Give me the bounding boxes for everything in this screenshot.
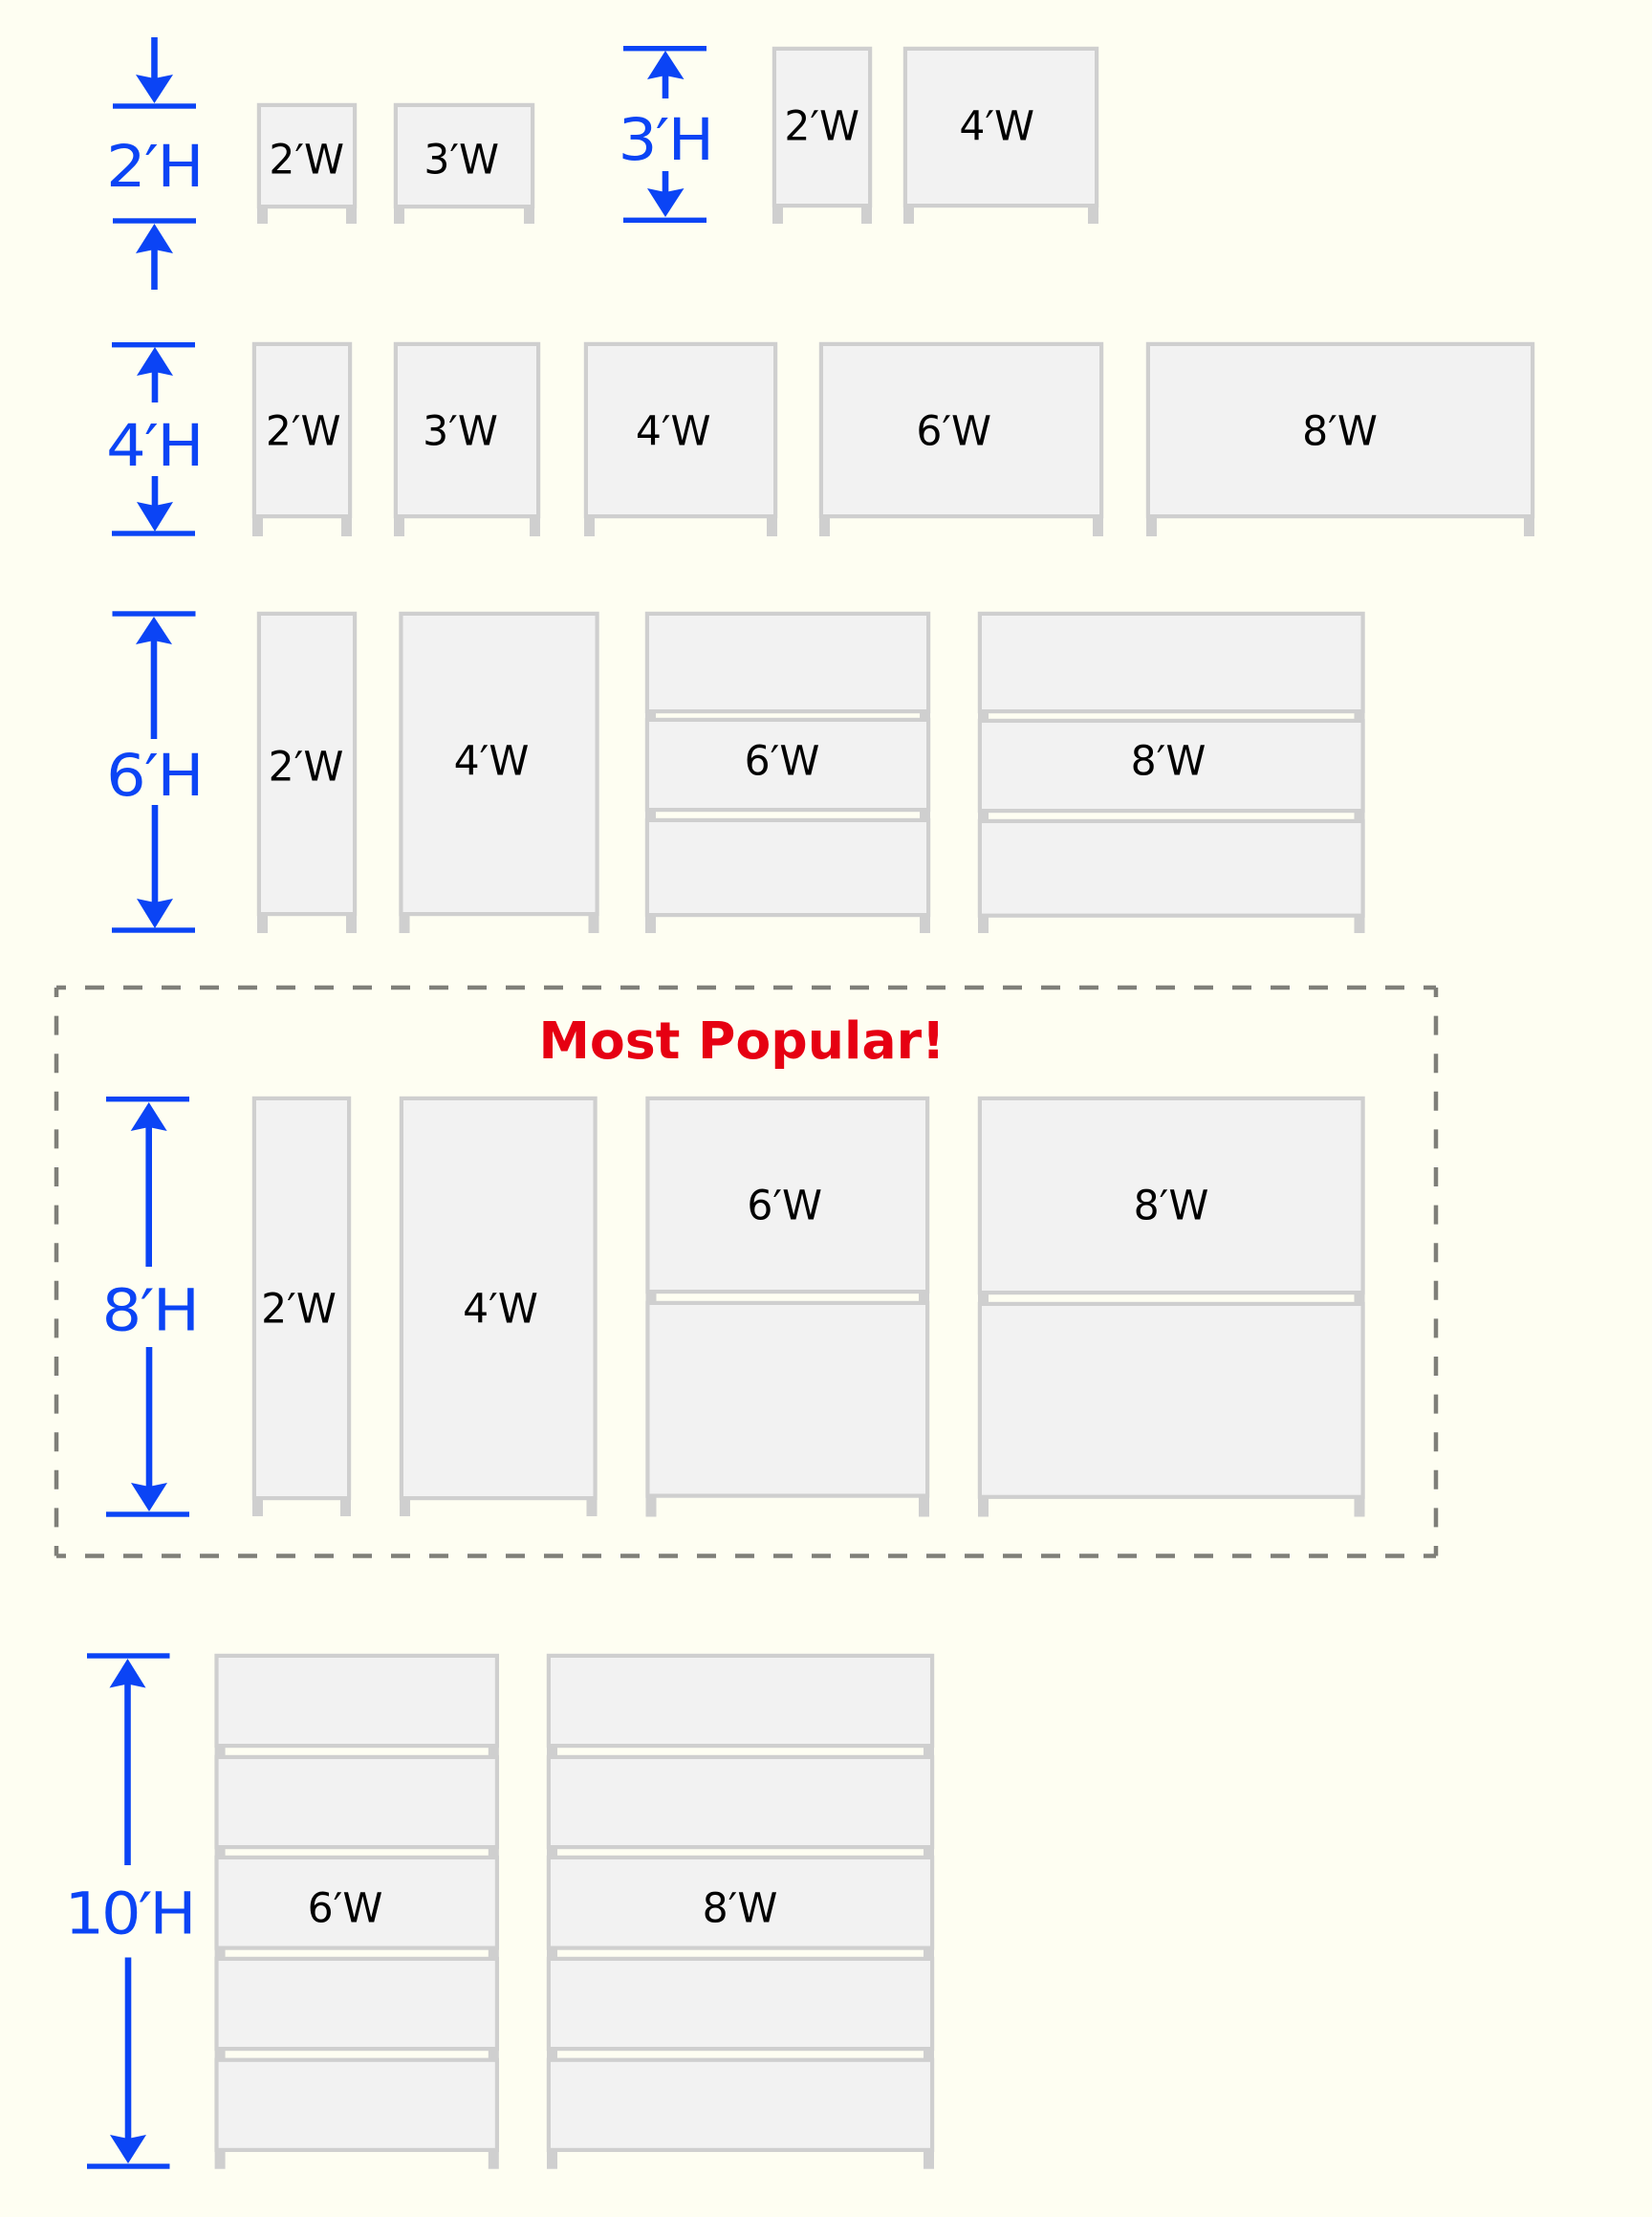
cabinet: 10'H x 8'W	[547, 1656, 934, 2169]
cabinet: 6'H x 2'W: 2′W	[269, 744, 343, 792]
dimension: 2'H	[106, 37, 203, 290]
cabinet: 6'H x 6'W	[645, 614, 930, 933]
row: 6 foot height	[106, 611, 1365, 933]
cabinet: 8'H x 4'W: 4′W	[463, 1287, 538, 1333]
cabinet: 6'H x 2'W	[257, 614, 357, 933]
cabinet: 4'H x 4'W: 4′W	[636, 409, 711, 455]
cabinet: 4'H x 6'W: 6′W	[916, 409, 991, 455]
cabinet: 4'H x 2'W	[252, 344, 352, 536]
cabinet: 4'H x 3'W: 3′W	[423, 409, 498, 455]
cabinet: 6'H x 8'W: 8′W	[1131, 738, 1206, 786]
cabinet: 6'H x 6'W: 6′W	[745, 738, 819, 786]
dimension: 3'H	[619, 46, 712, 223]
cabinet: 4'H x 6'W	[819, 344, 1103, 536]
dimension: 4'H	[106, 342, 203, 536]
cabinet: 8'H x 8'W: 8′W	[1134, 1184, 1208, 1229]
cabinet: 8'H x 4'W	[400, 1098, 597, 1516]
cabinet: 6'H x 4'W: 4′W	[454, 738, 529, 786]
dimension: 6'H	[106, 611, 203, 933]
cabinet: 4'H x 8'W	[1146, 344, 1534, 536]
row: 3 foot height	[619, 46, 1098, 224]
dimension: 10'H	[65, 1653, 193, 2169]
cabinet: 2'H x 2'W	[257, 105, 357, 224]
row: 10 foot height	[65, 1653, 934, 2169]
cabinet: 3'H x 2'W: 2′W	[784, 103, 859, 151]
cabinet: 8'H x 6'W: 6′W	[747, 1184, 822, 1229]
dimension: 3'H: 3′H	[619, 106, 712, 174]
dimension: 4'H: 4′H	[106, 412, 203, 479]
row: 2 foot height	[106, 37, 534, 290]
dimension: 10'H: 10′H	[65, 1880, 193, 1947]
dimension: 8'H	[102, 1097, 198, 1517]
dimension: 6'H: 6′H	[106, 742, 203, 809]
cabinet: 4'H x 4'W	[584, 344, 777, 536]
cabinet: 3'H x 4'W: 4′W	[959, 103, 1034, 151]
cabinet: 6'H x 4'W	[400, 614, 598, 933]
row: 4 foot height	[106, 342, 1534, 536]
cabinet: 10'H x 6'W	[215, 1656, 499, 2169]
cabinet: 2'H x 2'W: 2′W	[269, 138, 344, 184]
cabinet: 4'H x 2'W: 2′W	[266, 409, 341, 455]
cabinet: 10'H x 8'W: 8′W	[703, 1885, 777, 1933]
cabinet: 8'H x 2'W: 2′W	[261, 1287, 337, 1333]
cabinet: 3'H x 4'W	[903, 49, 1098, 224]
panel: most popular dashed highlight	[56, 988, 1436, 1556]
cabinet: 2'H x 3'W: 3′W	[424, 138, 499, 184]
dimension: 8'H: 8′H	[102, 1277, 198, 1344]
heading: Most Popular!: Most Popular!	[538, 1011, 946, 1071]
cabinet: 2'H x 3'W	[394, 105, 534, 224]
cabinet: 6'H x 8'W	[978, 614, 1365, 933]
cabinet: 8'H x 2'W	[252, 1098, 351, 1516]
cabinet: 4'H x 8'W: 8′W	[1302, 409, 1378, 455]
cabinet: 8'H x 6'W	[646, 1098, 929, 1516]
cabinet: 10'H x 6'W: 6′W	[308, 1885, 382, 1933]
cabinet: 3'H x 2'W	[772, 49, 872, 224]
dimension: 2'H: 2′H	[106, 133, 203, 200]
cabinet: 4'H x 3'W	[394, 344, 540, 536]
cabinet: 8'H x 8'W	[978, 1098, 1365, 1516]
